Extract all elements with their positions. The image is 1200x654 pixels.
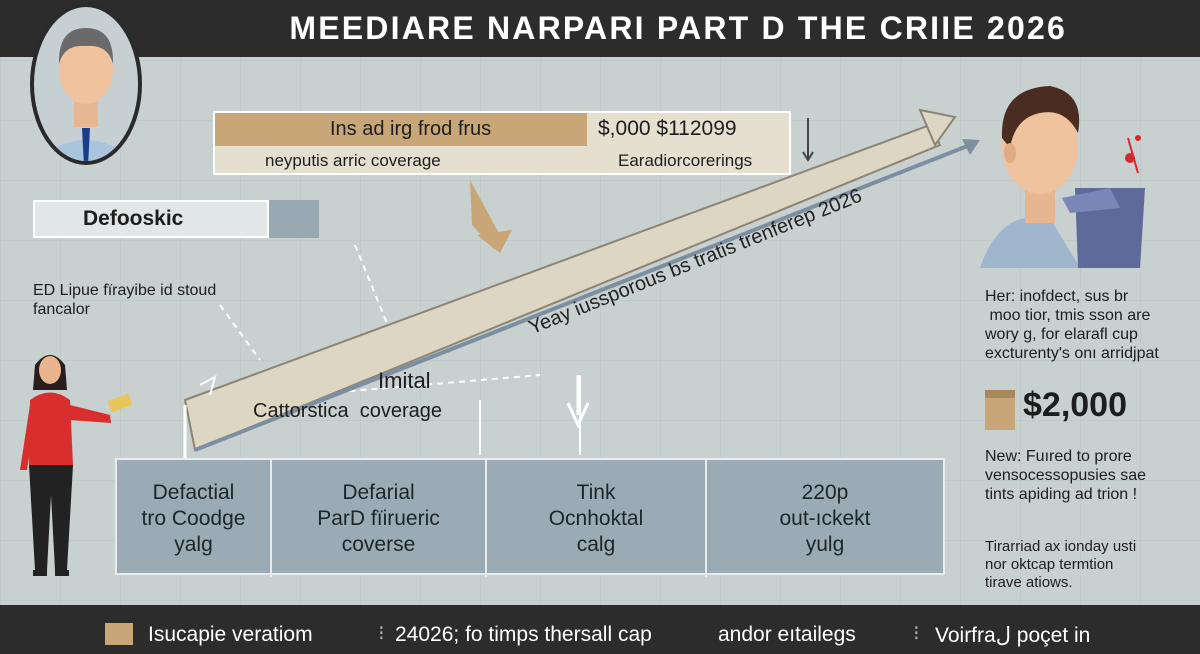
right text block 1: wory g, for elarafl cup <box>985 326 1138 343</box>
cell 4: out-ıckekt <box>779 506 871 530</box>
right text block 1 <box>985 288 1159 362</box>
woman figure <box>20 355 132 576</box>
right text block 1: excturenty's onı arridjpat <box>985 345 1159 362</box>
cell 1: Defactial <box>153 480 234 504</box>
cell 2: Defarial <box>342 480 415 504</box>
label: Imital coverage: Cattorstica coverage <box>253 400 442 422</box>
label: Imital coverage <box>253 368 442 422</box>
cell 3 <box>487 460 707 577</box>
right text block 1: Her: inofdect, sus br <box>985 288 1128 305</box>
bottom bar: ⁝ <box>378 622 385 645</box>
defooskic box: Defooskic <box>83 207 183 230</box>
right text block 3: tirave atiows. <box>985 574 1073 591</box>
right text block 1: moo tior, tmis sson are <box>989 307 1150 324</box>
right text block 2: tints apiding ad trion ! <box>985 486 1137 503</box>
defooskic box <box>33 200 319 238</box>
right text block 2: New: Fuıred to prore <box>985 448 1132 465</box>
price icon <box>985 386 1127 430</box>
top info box: $,000 $112099 <box>598 117 737 140</box>
cell 2: ParD fïirueric <box>317 506 440 530</box>
bottom bar: Isucapie veratiom <box>148 623 313 646</box>
cell 1: yalg <box>174 532 213 556</box>
cell 1 <box>117 460 272 577</box>
right text block 2: vensocessopusies sae <box>985 467 1146 484</box>
cell 4: 220p <box>802 480 848 504</box>
price icon: $2,000 <box>1023 386 1127 424</box>
bottom bar: ⁝ <box>913 622 920 645</box>
cell 2: coverse <box>342 532 415 556</box>
cell 1: tro Coodge <box>142 506 245 530</box>
bottom bar: andor eıtailegs <box>718 623 856 646</box>
cell 4: yulg <box>806 532 844 556</box>
bottom icon <box>105 623 133 645</box>
cell 3: Tink <box>577 480 615 504</box>
tan header band <box>215 113 587 146</box>
avatar: man top-left <box>30 7 142 165</box>
main diagonal arrows <box>184 108 980 458</box>
right text block 2 <box>985 448 1146 503</box>
right text block 3 <box>985 538 1136 591</box>
title bar: MEEDIARE NARPARI PART D THE CRIΙE 2026 <box>289 10 1067 46</box>
title bar <box>0 0 1200 57</box>
man figure right with device <box>980 86 1145 268</box>
cell 2 <box>272 460 487 577</box>
bottom bar: 24026; fo timps thersall cap <box>395 623 652 646</box>
top info box: Earadiorcorerings <box>618 151 752 170</box>
right text block 3: Tirarriad ax ionday usti <box>985 538 1136 555</box>
right text block 3: nor oktcap termtion <box>985 556 1113 573</box>
bottom bar: Voirfraل poçet in <box>935 624 1090 647</box>
main diagonal arrows: Yeay iussporous bs tratis trenferep 2026 <box>526 185 865 339</box>
cell 3: Ocnhoktal <box>549 506 643 530</box>
top info box: neyputis arric coverage <box>265 151 441 170</box>
left text: ED Lipue fïrayibe id stoud <box>33 282 216 299</box>
left text <box>33 282 216 318</box>
top info box <box>213 111 791 175</box>
tan header band: Ins ad irg frod frus <box>330 118 491 140</box>
arrow: small down arrow <box>802 118 814 162</box>
bottom bar <box>0 605 1200 654</box>
cell 3: calg <box>577 532 615 556</box>
left text: fancalor <box>33 301 90 318</box>
label: Imital coverage: Imital <box>378 368 431 393</box>
table row <box>115 458 945 575</box>
cell 4 <box>779 480 871 556</box>
